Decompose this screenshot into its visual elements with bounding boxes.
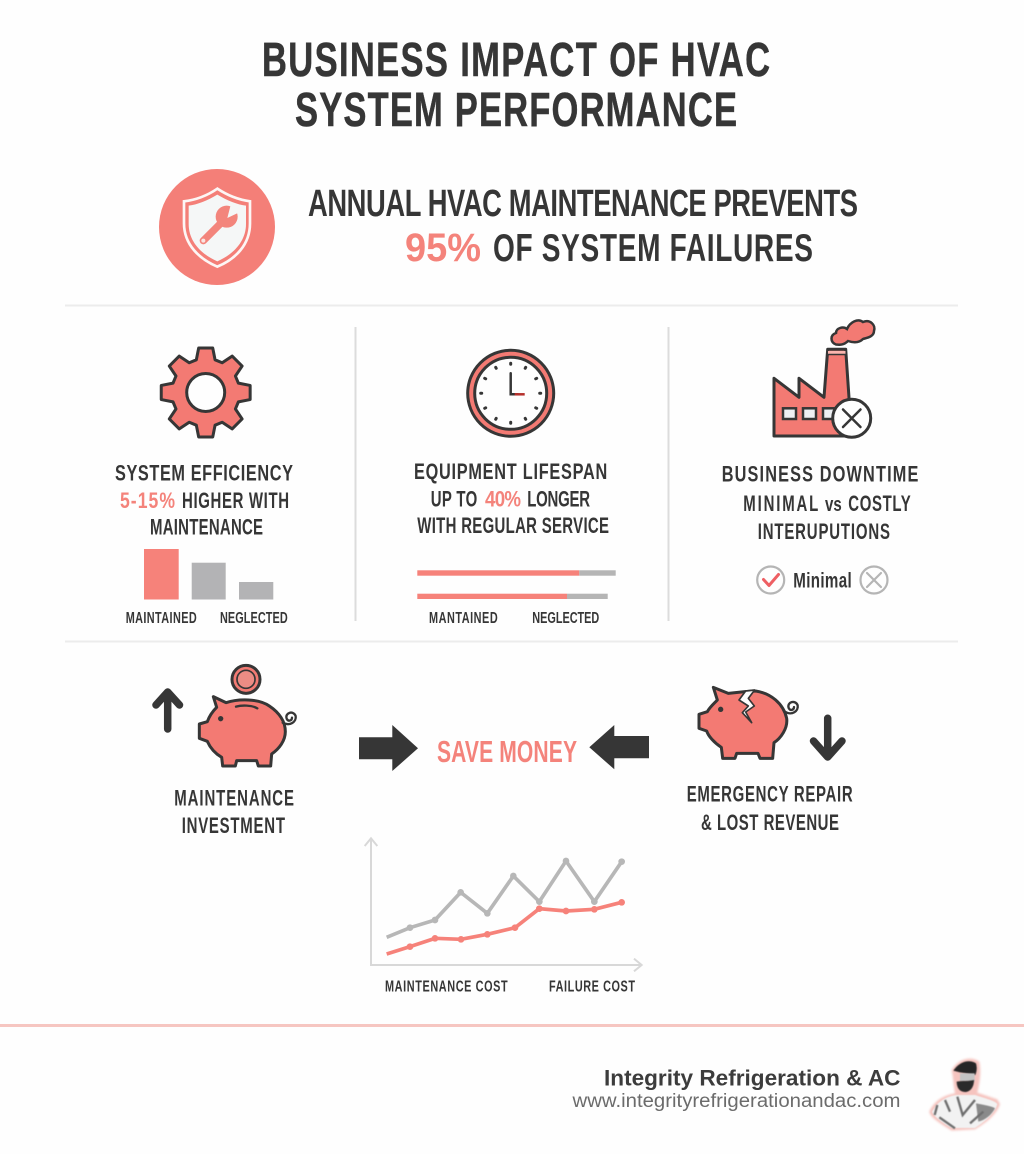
progress bars: lifespan — [417, 570, 616, 627]
heading: system efficiency: SYSTEM EFFICIENCY — [115, 461, 293, 486]
panel: system efficiency — [115, 348, 293, 627]
icon: clock — [468, 350, 554, 436]
icon: technician portrait — [929, 1059, 1000, 1131]
heading: business downtime: MINIMAL — [743, 491, 818, 516]
headline — [308, 183, 858, 270]
heading: system efficiency: MAINTENANCE — [150, 515, 263, 539]
heading: system efficiency: 5-15% — [120, 489, 175, 514]
title — [262, 32, 770, 136]
heading: business downtime: COSTLY — [848, 491, 911, 516]
heading: system efficiency: HIGHER WITH — [182, 488, 289, 513]
legend: minimal check and cross: Minimal — [793, 568, 852, 592]
panel: equipment lifespan — [414, 350, 616, 627]
heading: business downtime: vs — [825, 494, 842, 516]
heading: equipment lifespan — [414, 460, 609, 538]
label: maintenance investment: INVESTMENT — [182, 813, 285, 838]
heading: equipment lifespan: 40% — [485, 488, 521, 512]
icon: up arrow — [156, 692, 180, 729]
callout: save money: SAVE MONEY — [437, 734, 577, 769]
bar chart: efficiency: NEGLECTED — [220, 609, 288, 627]
title: SYSTEM PERFORMANCE — [295, 82, 737, 136]
footer rule — [0, 1024, 1024, 1027]
heading: system efficiency — [115, 461, 293, 539]
line chart: maintenance vs failure cost: MAINTENANCE COST — [385, 977, 508, 995]
headline: ANNUAL HVAC MAINTENANCE PREVENTS — [308, 183, 858, 225]
heading: equipment lifespan: UP TO — [431, 487, 477, 511]
legend: minimal check and cross — [757, 566, 888, 594]
label: maintenance investment — [174, 786, 294, 838]
heading: business downtime — [722, 462, 918, 544]
heading: equipment lifespan: WITH REGULAR SERVICE — [417, 513, 609, 538]
label: emergency repair: EMERGENCY REPAIR — [687, 782, 853, 806]
arrow: right to save money — [359, 725, 418, 771]
footer: company name and url — [571, 1066, 900, 1112]
icon: shield with wrench — [159, 169, 275, 285]
panel: business downtime — [722, 320, 918, 594]
icon: down arrow — [814, 718, 842, 757]
label: emergency repair: & LOST REVENUE — [701, 810, 839, 835]
title: BUSINESS IMPACT OF HVAC — [262, 32, 770, 86]
bar chart: efficiency: MAINTAINED — [126, 609, 197, 627]
footer: company name and url: Integrity Refrigeration & AC — [604, 1066, 900, 1090]
bar chart: efficiency — [126, 549, 288, 627]
line chart: maintenance vs failure cost — [365, 838, 642, 995]
icon: gear — [161, 348, 250, 437]
icon: factory with cross — [774, 320, 874, 437]
progress bars: lifespan: MANTAINED — [429, 609, 498, 627]
heading: equipment lifespan: EQUIPMENT LIFESPAN — [414, 460, 607, 485]
arrow: left to save money — [589, 725, 649, 769]
icon: piggy bank with coin — [199, 665, 296, 766]
heading: equipment lifespan: LONGER — [527, 487, 590, 511]
progress bars: lifespan: NEGLECTED — [532, 609, 599, 627]
heading: business downtime: INTERUPUTIONS — [758, 519, 890, 544]
footer: company name and url: www.integrityrefrigerationandac.com — [571, 1091, 900, 1112]
heading: business downtime: BUSINESS DOWNTIME — [722, 462, 918, 487]
headline: 95% — [405, 226, 481, 270]
panel: emergency repair — [687, 687, 853, 835]
headline: OF SYSTEM FAILURES — [493, 227, 813, 270]
panel: maintenance investment — [156, 665, 296, 838]
label: emergency repair — [687, 782, 853, 835]
label: maintenance investment: MAINTENANCE — [174, 786, 294, 810]
line chart: maintenance vs failure cost: FAILURE COST — [549, 977, 636, 995]
icon: broken piggy bank — [699, 687, 798, 758]
